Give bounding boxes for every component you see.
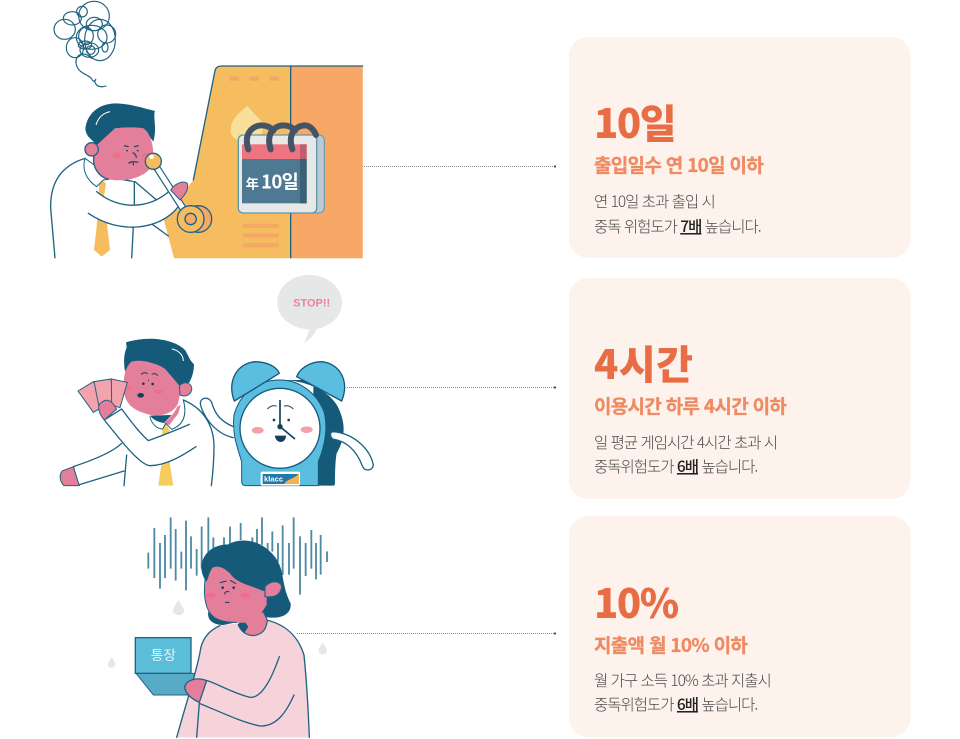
far arm bbox=[73, 443, 124, 485]
face details bbox=[113, 146, 149, 165]
ear bbox=[265, 582, 282, 597]
arm bbox=[88, 190, 182, 227]
panel: 10 days card bbox=[569, 37, 910, 258]
icon: calendar bbox=[238, 125, 324, 213]
clock body bbox=[234, 380, 326, 486]
bankbook bbox=[135, 638, 195, 695]
icon: calendar: 10일 bbox=[261, 168, 298, 195]
ear bbox=[179, 383, 192, 396]
water drops bbox=[108, 600, 327, 668]
playing cards bbox=[78, 379, 127, 412]
clock left arm bbox=[200, 398, 233, 438]
face bbox=[204, 562, 267, 623]
heading: 10%: 10% bbox=[594, 572, 679, 630]
lever bbox=[154, 163, 182, 207]
hand bbox=[99, 400, 117, 420]
cropping edge bbox=[0, 258, 367, 265]
sweater bbox=[177, 620, 309, 737]
man collar bbox=[84, 158, 133, 187]
clock right arm bbox=[330, 432, 373, 470]
ear bbox=[85, 143, 98, 156]
body text bbox=[594, 431, 777, 477]
far hand bbox=[60, 467, 79, 486]
klacc logo bbox=[261, 472, 300, 486]
clock face bbox=[240, 388, 320, 468]
tie bbox=[158, 423, 173, 486]
connector line 1 bbox=[364, 165, 556, 168]
klacc logo: klacc bbox=[264, 475, 284, 484]
hair bbox=[124, 339, 194, 387]
body text bbox=[594, 669, 771, 715]
body text bbox=[594, 190, 761, 237]
sound wave bars bbox=[148, 517, 327, 595]
bells bbox=[232, 362, 279, 401]
clock back bbox=[280, 380, 344, 486]
icon: tangled thought scribble bbox=[54, 1, 116, 87]
near arm bbox=[104, 409, 196, 466]
body text: 중독 위험도가 7배 높습니다. bbox=[594, 215, 761, 237]
body text: 연 10일 초과 출입 시 bbox=[594, 190, 715, 212]
face bbox=[124, 361, 180, 415]
clock hands bbox=[280, 400, 295, 439]
body text: 중독위험도가 6배 높습니다. bbox=[594, 693, 757, 715]
illustration: man at slot machine bbox=[0, 1, 367, 265]
heading: 10일: 10일 bbox=[594, 92, 675, 150]
panel: 4 hours card bbox=[569, 278, 910, 499]
subheading: 출입일수 연 10일 이하 bbox=[594, 151, 764, 178]
lever wheel bbox=[177, 206, 212, 232]
hair top bbox=[201, 540, 283, 591]
body text: 월 가구 소득 10% 초과 지출시 bbox=[594, 669, 771, 691]
subheading: 지출액 월 10% 이하 bbox=[594, 631, 748, 658]
illustration: man with cards and alarm clock bbox=[60, 275, 373, 486]
clock expression bbox=[252, 406, 313, 442]
slot machine cabinet bbox=[163, 66, 363, 258]
subheading: 이용시간 하루 4시간 이하 bbox=[594, 392, 787, 419]
icon: calendar: 年 bbox=[246, 174, 259, 193]
body text: 일 평균 게임시간 4시간 초과 시 bbox=[594, 431, 777, 453]
cabinet dashes bbox=[229, 76, 279, 247]
hand bbox=[185, 679, 207, 702]
connector line 2 bbox=[347, 386, 556, 389]
collar bbox=[150, 400, 185, 429]
illustration: woman with bankbook bbox=[108, 517, 327, 737]
tie bbox=[94, 181, 110, 257]
bankbook: 통장 bbox=[151, 644, 176, 664]
neck bbox=[150, 415, 172, 423]
hair back bbox=[208, 572, 291, 625]
heading: 4시간: 4시간 bbox=[594, 333, 693, 391]
hand bbox=[171, 182, 188, 200]
speech bubble bbox=[277, 275, 342, 343]
neck bbox=[238, 612, 267, 636]
man body bbox=[51, 158, 180, 258]
face details bbox=[206, 580, 250, 602]
man body bbox=[110, 400, 214, 486]
flame bbox=[231, 106, 263, 142]
hair bbox=[85, 103, 155, 147]
alarm clock bbox=[200, 362, 373, 486]
speech bubble: STOP!! bbox=[293, 297, 330, 309]
face bbox=[93, 127, 153, 180]
body text: 중독위험도가 6배 높습니다. bbox=[594, 455, 757, 477]
connector line 3 bbox=[297, 632, 556, 635]
panel: 10 percent card bbox=[569, 516, 910, 737]
face details bbox=[127, 373, 163, 398]
